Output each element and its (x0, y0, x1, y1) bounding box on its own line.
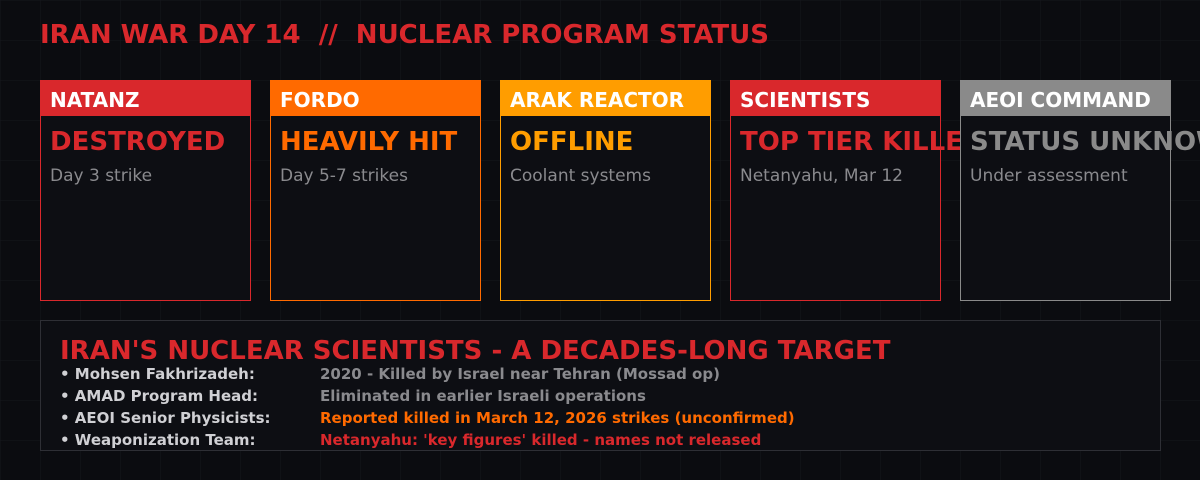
panel: scientists history (40, 320, 1160, 450)
panel: fordo: Day 5-7 strikes (280, 166, 408, 186)
title: IRAN WAR DAY 14 // NUCLEAR PROGRAM STATUS (40, 20, 769, 50)
list: • Mohsen Fakhrizadeh: (60, 365, 255, 383)
panel: fordo (270, 80, 481, 300)
list: Netanyahu: 'key figures' killed - names not released (320, 431, 761, 449)
panel: arak reactor: OFFLINE (510, 127, 633, 157)
panel: aeoi command: Under assessment (970, 166, 1128, 186)
list: 2020 - Killed by Israel near Tehran (Mossad op) (320, 365, 720, 383)
panel: natanz: NATANZ (50, 88, 139, 112)
list: • Weaponization Team: (60, 431, 256, 449)
panel: scientists (730, 80, 984, 300)
list: Eliminated in earlier Israeli operations (320, 387, 646, 405)
panel: arak reactor: Coolant systems (510, 166, 651, 186)
heading: IRAN'S NUCLEAR SCIENTISTS - A DECADES-LONG TARGET (60, 336, 891, 366)
panel: aeoi command (960, 80, 1200, 300)
panel: arak reactor: ARAK REACTOR (510, 88, 684, 112)
panel: fordo: FORDO (280, 88, 360, 112)
panel: natanz: Day 3 strike (50, 166, 152, 186)
list: • AEOI Senior Physicists: (60, 409, 271, 427)
panel: scientists: SCIENTISTS (740, 88, 870, 112)
panel: fordo: HEAVILY HIT (280, 127, 458, 157)
list: • AMAD Program Head: (60, 387, 258, 405)
panel: natanz: DESTROYED (50, 127, 225, 157)
panel: scientists: TOP TIER KILLED (740, 127, 984, 157)
panel: natanz (40, 80, 251, 300)
list (60, 365, 795, 449)
panel: arak reactor (500, 80, 711, 300)
panel: scientists: Netanyahu, Mar 12 (740, 166, 903, 186)
panel: aeoi command: AEOI COMMAND (970, 88, 1151, 112)
list: Reported killed in March 12, 2026 strikes (unconfirmed) (320, 409, 795, 427)
